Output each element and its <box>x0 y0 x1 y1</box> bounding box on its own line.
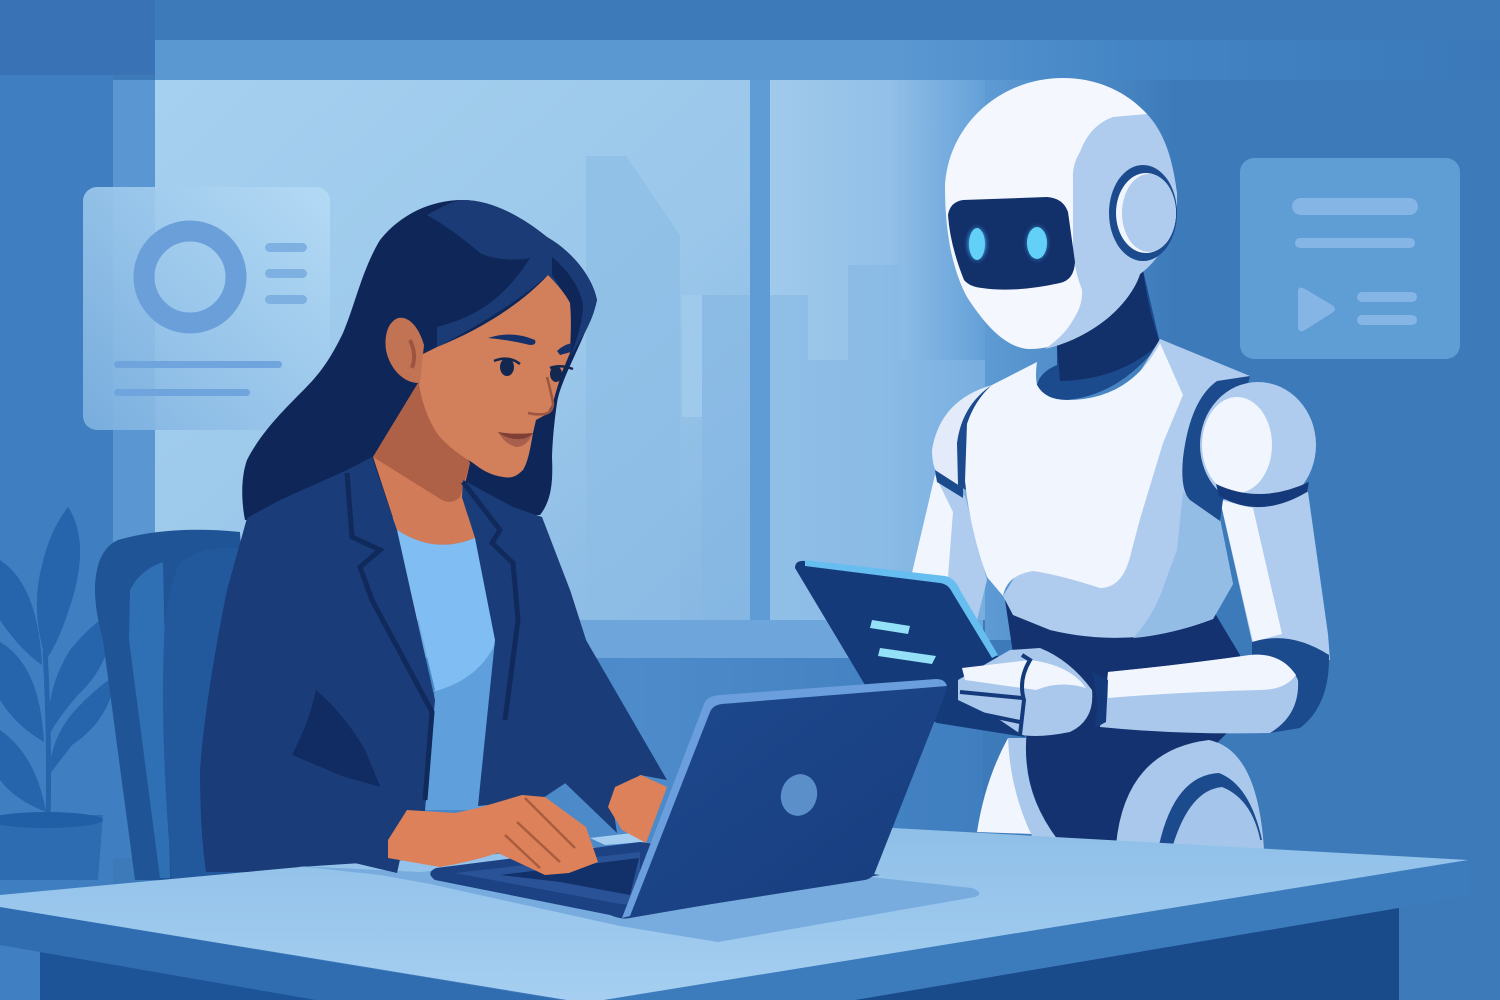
robot torso <box>965 339 1250 638</box>
robot elbow <box>1252 638 1329 733</box>
woman <box>200 200 600 872</box>
office chair <box>95 530 260 880</box>
plant pot <box>0 812 103 880</box>
robot neck <box>1037 270 1160 400</box>
robot head <box>945 78 1177 349</box>
robot right arm <box>1220 492 1330 660</box>
keyboard <box>500 858 639 895</box>
robot forearm <box>1100 655 1298 733</box>
robot left arm <box>908 385 992 640</box>
tablet <box>795 560 1025 737</box>
laptop logo <box>776 770 822 820</box>
blazer <box>200 457 600 872</box>
robot eyes <box>963 221 1052 266</box>
face <box>417 275 571 477</box>
hair <box>242 200 597 520</box>
ear <box>386 318 424 383</box>
far hand <box>608 775 667 843</box>
right sleeve <box>524 590 667 833</box>
neck and chest <box>373 383 475 545</box>
blouse <box>397 530 497 810</box>
panel: right media card <box>1240 158 1460 359</box>
main hand <box>388 795 598 875</box>
blazer inner shadow <box>292 690 383 793</box>
laptop base <box>430 832 880 919</box>
laptop lid <box>622 679 947 918</box>
robot waist <box>1005 600 1250 740</box>
woman's arms and hands <box>200 590 667 875</box>
card text lines <box>1292 198 1418 248</box>
laptop shadow <box>297 850 979 942</box>
robot shoulder <box>1182 376 1316 521</box>
eyes, brows, nose and mouth <box>488 334 573 447</box>
robot <box>795 78 1330 850</box>
robot ear <box>1109 165 1177 261</box>
robot lower body and wheel <box>977 720 1264 850</box>
panel: left chart card <box>83 187 330 430</box>
card list lines <box>1357 292 1417 325</box>
robot visor <box>948 197 1075 290</box>
icon: donut ring <box>144 231 236 323</box>
robot hand <box>958 648 1108 736</box>
desk <box>0 828 1470 1000</box>
left sleeve <box>200 754 411 873</box>
window with city skyline <box>113 80 985 858</box>
card list lines <box>265 243 307 304</box>
icon: play triangle <box>1298 288 1335 331</box>
lapel lines <box>347 473 518 800</box>
card text lines <box>114 361 282 396</box>
plant <box>0 507 116 880</box>
